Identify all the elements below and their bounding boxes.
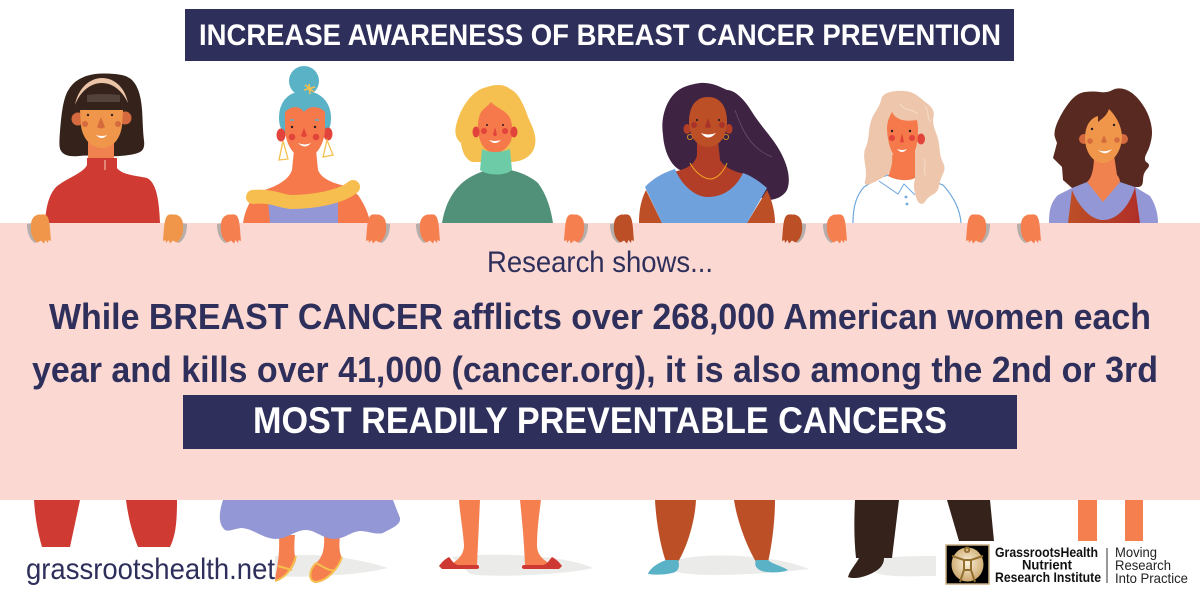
woman 1: black bob, red top	[45, 74, 160, 223]
icon: vitruvian man emblem	[946, 545, 989, 584]
title banner	[185, 9, 1014, 61]
highlighted banner: most readily preventable cancers	[183, 395, 1017, 449]
institute name: Nutrient	[1022, 556, 1072, 572]
woman 4 legs and teal shoes	[648, 500, 809, 575]
tagline	[1115, 544, 1188, 586]
website address: grassrootshealth.net	[26, 553, 276, 586]
institute name: GrassrootsHealth	[995, 544, 1098, 560]
woman 6 legs	[1078, 500, 1143, 541]
tagline: Moving	[1115, 544, 1157, 560]
woman 3 legs and red flats	[439, 500, 593, 576]
tagline: Research	[1115, 557, 1171, 573]
body statement text	[32, 296, 1158, 390]
woman 2: teal bun, yellow scarf	[243, 66, 370, 223]
woman 5: wavy blonde hair, white shirt	[853, 91, 961, 223]
title banner: INCREASE AWARENESS OF BREAST CANCER PREVENTION	[199, 19, 1001, 52]
pink message panel background	[0, 223, 1200, 500]
woman 1 legs	[34, 500, 177, 547]
highlighted banner: most readily preventable cancers: MOST READILY PREVENTABLE CANCERS	[253, 400, 947, 441]
hand holding the panel: woman 6	[1017, 214, 1041, 244]
hands holding the panel: woman 3	[416, 214, 588, 244]
hands holding the panel: woman 2	[217, 214, 390, 244]
woman 6: dark curly hair, purple and red top	[1049, 88, 1158, 223]
hands holding the panel: woman 1	[27, 214, 187, 244]
institute name: Research Institute	[995, 569, 1101, 585]
woman 2 skirt, legs and sandals	[220, 500, 400, 582]
subheading: research shows: Research shows...	[487, 246, 713, 279]
woman 5 dark trousers and shoe	[848, 500, 994, 578]
GrassrootsHealth logo block	[946, 544, 1188, 586]
institute name	[995, 544, 1101, 585]
woman 3: blonde bob, green turtleneck	[442, 85, 553, 223]
hands holding the panel: woman 4	[610, 214, 806, 244]
tagline: Into Practice	[1115, 570, 1188, 586]
woman 4: long dark hair, blue top	[639, 83, 789, 223]
body statement text: While BREAST CANCER afflicts over 268,000 American women each	[49, 296, 1151, 337]
hands holding the panel: woman 5	[823, 214, 990, 244]
